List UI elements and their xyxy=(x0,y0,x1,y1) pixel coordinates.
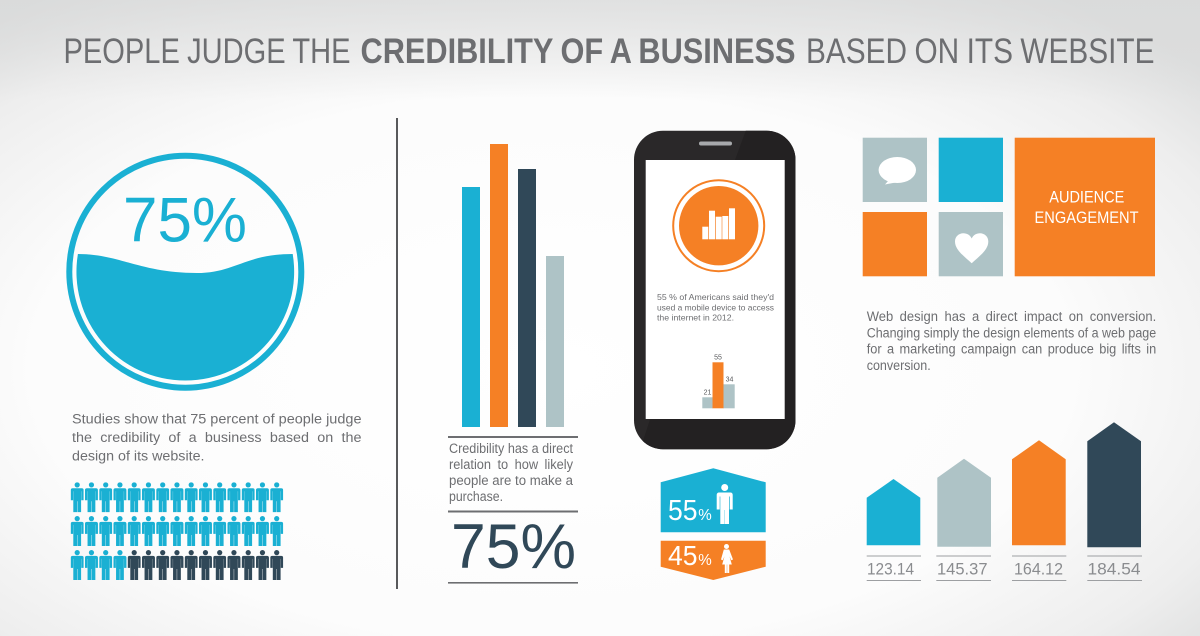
text block: credibility relation: purchase. xyxy=(449,489,503,504)
text block: studies show xyxy=(72,412,362,464)
tile: orange xyxy=(863,212,927,276)
text block: studies show: the credibility of a business based on the xyxy=(72,430,362,445)
house bar 145.37 xyxy=(936,459,991,581)
badge: 55 percent men: % xyxy=(698,507,712,524)
people row 2 xyxy=(71,516,283,546)
tile: audience engagement: AUDIENCE xyxy=(1049,188,1124,207)
phone mini bar chart: 34 xyxy=(726,376,733,384)
text block: credibility relation xyxy=(448,436,578,512)
phone text: 55 % of Americans said they'd xyxy=(657,293,774,302)
chart: house bars xyxy=(867,422,1142,581)
text block: web design xyxy=(867,309,1156,373)
text block: credibility relation: Credibility has a direct xyxy=(449,441,573,456)
text block: credibility relation: people are to make a xyxy=(449,473,573,488)
icon: heart xyxy=(955,233,988,263)
text block: studies show: Studies show that 75 percent of people judge xyxy=(72,412,362,426)
text block: web design: conversion. xyxy=(867,358,931,373)
house bar 184.54: 184.54 xyxy=(1088,561,1140,579)
phone screen xyxy=(646,160,785,419)
phone xyxy=(634,130,796,450)
title: CREDIBILITY OF A BUSINESS xyxy=(360,32,796,71)
house bar 184.54 xyxy=(1087,422,1142,581)
people row 1 xyxy=(71,482,283,512)
text block: web design: Changing simply the design elements of a web page xyxy=(867,325,1156,340)
phone speaker xyxy=(699,142,732,146)
gauge water fill xyxy=(76,254,294,381)
house bar 123.14: 123.14 xyxy=(867,561,914,579)
icon: man xyxy=(717,484,733,524)
people row 3 xyxy=(71,550,283,580)
title: PEOPLE JUDGE THE xyxy=(64,32,350,71)
bar chart: credibility xyxy=(462,144,564,427)
phone text: used a mobile device to access xyxy=(657,304,774,312)
text block: web design: Web design has a direct impact on conversion. xyxy=(867,309,1156,324)
tile: speech bubble xyxy=(863,138,927,202)
gauge ring xyxy=(69,156,301,388)
badge: 45 percent women xyxy=(661,540,766,580)
statistic: 75 percent: 75% xyxy=(451,512,576,582)
phone mini bar chart: 21 xyxy=(704,390,711,396)
text block: web design: for a marketing campaign can produce big lifts in xyxy=(867,342,1156,357)
phone mini bar chart: 55 xyxy=(714,354,722,362)
phone mini bar chart xyxy=(702,354,735,408)
house bar 145.37: 145.37 xyxy=(937,561,988,579)
tile: audience engagement: ENGAGEMENT xyxy=(1034,208,1138,227)
tile: heart xyxy=(939,212,1003,276)
house bar 123.14 xyxy=(867,479,921,581)
house bar 164.12: 164.12 xyxy=(1014,561,1063,579)
icon: speech bubble xyxy=(879,157,916,184)
icon: woman xyxy=(721,544,733,573)
phone text xyxy=(657,293,774,323)
phone text: the internet in 2012. xyxy=(657,314,734,323)
text block: studies show: design of its website. xyxy=(72,448,204,464)
phone body xyxy=(634,130,796,450)
title xyxy=(64,32,1154,71)
tile: blue xyxy=(939,138,1003,202)
icon: orange chart badge xyxy=(673,180,764,271)
panel: 75 percent circle xyxy=(69,156,301,388)
tile: audience engagement xyxy=(1015,138,1155,276)
badge: 45 percent women: 45 xyxy=(668,540,698,571)
badge: 55 percent men xyxy=(661,468,766,532)
text block: credibility relation: relation to how likely xyxy=(449,457,573,472)
badge: 45 percent women: % xyxy=(698,552,712,569)
badge: 55 percent men: 55 xyxy=(668,495,698,527)
gauge value: 75% xyxy=(123,186,247,256)
house bar 164.12 xyxy=(1012,440,1066,581)
pictogram: people 75 percent xyxy=(71,482,283,580)
